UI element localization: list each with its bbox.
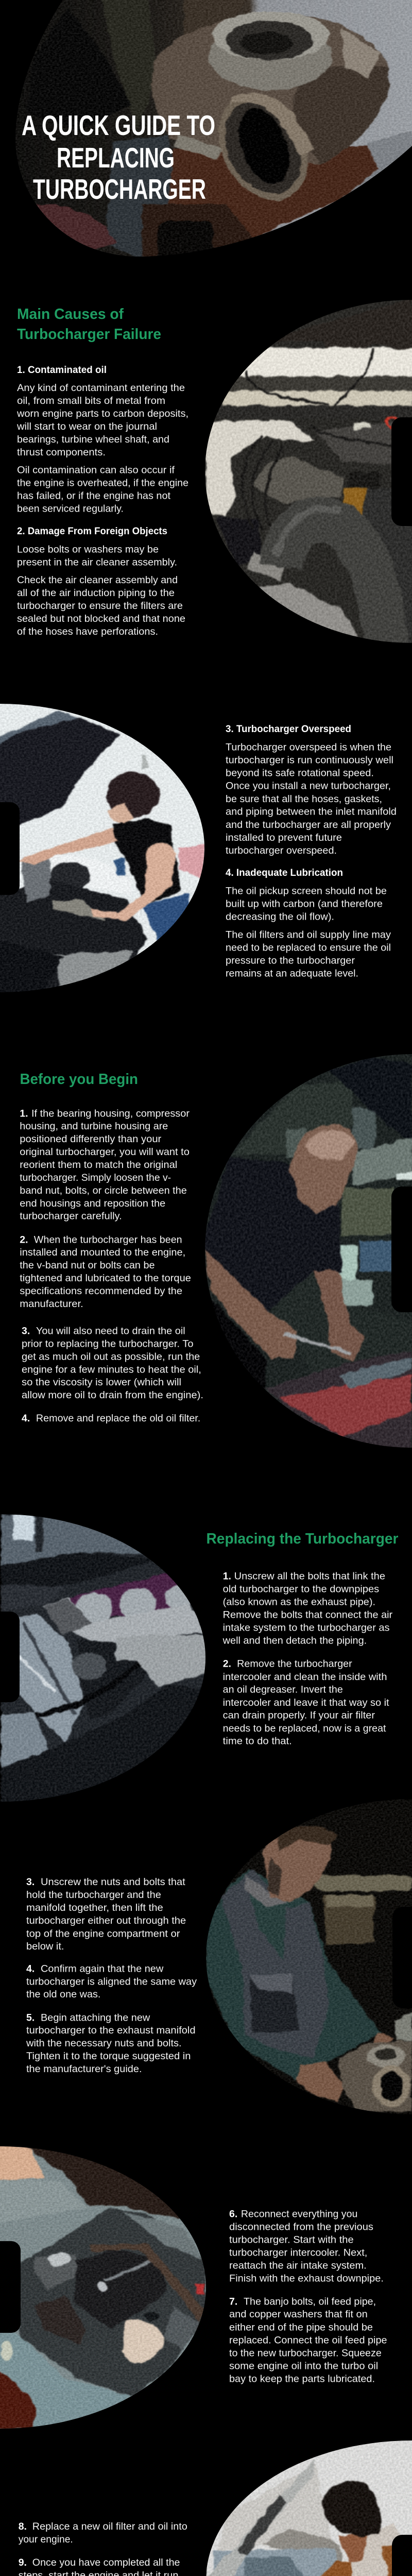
text block: replacing steps 1 and 2: Unscrew all the bolts that link the [234,1571,385,1582]
text block: replacing steps 3 to 5: manifold together, then lift the [26,1902,163,1913]
text block: causes 1 and 2: the engine is overheated, if the engine [17,477,188,488]
text block: before you begin steps: engine for a few minutes to heat the oil, [22,1364,201,1375]
text block: replacing steps 3 to 5: Confirm again that the new [41,1963,164,1974]
text block: before you begin steps: manufacturer. [20,1298,83,1310]
text block: replacing steps 6 and 7: Finish with the exhaust downpipe. [229,2273,384,2284]
text block: replacing steps 3 to 5: turbocharger is aligned the same way [26,1976,197,1987]
text block: causes 3 and 4: The oil pickup screen should not be [226,885,387,896]
text block: before you begin steps: 2. [20,1234,28,1245]
text block: causes 1 and 2 [16,364,188,637]
text block: causes 1 and 2: turbocharger to ensure the filters are [17,600,183,612]
text block: causes 1 and 2: thrust components. [17,447,106,458]
text block: before you begin steps: 1. [20,1108,28,1119]
notch: blue engine photo [0,1612,20,1702]
text block: replacing steps 1 and 2: well and then detach the piping. [222,1635,367,1647]
text block: before you begin steps: end housings and reposition the [20,1198,165,1209]
notch: BMW photo [0,2241,21,2333]
notch: woman photo [0,802,20,895]
text block: replacing steps 8 to 10: 9. [19,2557,27,2568]
text block: causes 3 and 4: pressure to the turbocharger [226,955,355,967]
heading: main causes [17,306,161,343]
text block: causes 1 and 2: oil, from small bits of metal from [17,395,165,406]
text block: before you begin steps: turbocharger carefully. [20,1211,122,1222]
text block: before you begin steps [20,1108,203,1424]
text block: causes 3 and 4: decreasing the oil flow). [226,911,334,923]
photo: BMW engine bay [0,2143,215,2435]
text block: replacing steps 1 and 2: can drain properly. If your air filter [223,1710,375,1721]
text block: replacing steps 6 and 7: The banjo bolts, oil feed pipe, [244,2296,376,2307]
text block: replacing steps 8 to 10: Once you have completed all the [32,2557,180,2568]
text block: causes 1 and 2: all of the air induction piping to the [17,587,175,599]
photo: blue engine bay [1,1510,211,1808]
text block: causes 3 and 4: Once you install a new turbocharger, [226,780,391,791]
text block: causes 3 and 4: built up with carbon (and therefore [226,898,383,909]
text block: causes 3 and 4: need to be replaced to ensure the oil [226,942,391,953]
text block: before you begin steps: the v-band nut or bolts can be [20,1260,155,1271]
text block: replacing steps 6 and 7: disconnected from the previous [229,2221,373,2232]
notch: vest mechanic photo [392,1907,412,2008]
text block: replacing steps 3 to 5: 5. [26,2012,35,2023]
text block: replacing steps 6 and 7: reattach the air intake system. [229,2260,367,2272]
text block: replacing steps 6 and 7: bay to keep the parts lubricated. [229,2374,375,2385]
notch: engine bay photo [391,417,412,526]
heading: main causes: Main Causes of [17,306,124,323]
text block: causes 3 and 4: remains at an adequate level. [226,968,358,979]
heading: main causes: Turbocharger Failure [17,326,161,343]
text block: replacing steps 8 to 10 [19,2521,187,2576]
text block: before you begin steps: allow more oil to drain from the engine). [22,1389,203,1401]
text block: causes 1 and 2: Oil contamination can also occur if [17,465,175,476]
text block: replacing steps 1 and 2: intercooler and clean the inside with [223,1671,387,1683]
title: REPLACING [57,142,175,174]
text block: replacing steps 1 and 2: old turbocharger to the downpipes [223,1583,379,1595]
text block: replacing steps 3 to 5: 4. [26,1963,35,1974]
text block: before you begin steps: band nut, bolts, or circle between the [20,1185,187,1196]
text block: before you begin steps: You will also need to drain the oil [36,1325,185,1336]
text block: replacing steps 1 and 2: time to do that. [223,1736,292,1747]
text block: replacing steps 6 and 7: either end of the pipe should be [229,2321,373,2333]
text block: causes 3 and 4: beyond its safe rotational speed. [226,768,374,779]
text block: causes 1 and 2: worn engine parts to carbon deposits, [16,408,188,419]
text block: before you begin steps: tightened and lubricated to the torque [20,1273,191,1284]
text block: replacing steps 1 and 2: an oil degreaser. Invert the [223,1684,343,1696]
text block: before you begin steps: turbocharger. Simply loosen the v- [20,1172,171,1183]
text block: before you begin steps: installed and mounted to the engine, [20,1247,185,1258]
photo: woman checking engine [205,2437,412,2576]
text block: replacing steps 6 and 7: 7. [229,2296,237,2307]
text block: replacing steps 6 and 7: turbocharger. Start with the [229,2234,354,2245]
text block: before you begin steps: When the turbocharger has been [34,1234,182,1245]
text block: replacing steps 3 to 5: Tighten it to the torque suggested in [26,2050,191,2062]
text block: replacing steps 3 to 5 [26,1876,197,2075]
text block: replacing steps 1 and 2: Remove the turbocharger [237,1658,352,1669]
text block: causes 3 and 4: turbocharger overspeed. [226,845,337,856]
notch: mechanic photo [391,1187,412,1312]
text block: causes 1 and 2: will start to wear on the journal [16,421,157,432]
text block: replacing steps 6 and 7: 6. [229,2208,237,2219]
text block: causes 1 and 2: sealed but not blocked and that none [17,613,185,624]
text block: replacing steps 8 to 10: your engine. [19,2534,73,2545]
text block: causes 1 and 2: 2. Damage From Foreign Objects [17,526,167,537]
text block: causes 1 and 2: Any kind of contaminant entering the [17,382,185,394]
text block: before you begin steps: Remove and replace the old oil filter. [36,1413,200,1424]
text block: before you begin steps: specifications recommended by the [20,1285,182,1297]
text block: causes 3 and 4: installed to prevent future [226,832,342,843]
text block: before you begin steps: housing, and turbine housing are [20,1121,168,1132]
text block: causes 3 and 4: be sure that all the hoses, gaskets, [226,793,382,805]
text block: replacing steps 3 to 5: top of the engine compartment or [26,1928,180,1939]
text block: before you begin steps: If the bearing housing, compressor [31,1108,190,1119]
text block: replacing steps 1 and 2 [222,1571,393,1747]
text block: before you begin steps: reorient them to match the original [20,1159,177,1171]
text block: replacing steps 1 and 2: intercooler and leave it that way so it [223,1697,389,1708]
text block: replacing steps 3 to 5: Unscrew the nuts and bolts that [41,1876,185,1888]
text block: replacing steps 3 to 5: with the necessary nuts and bolts. [26,2038,182,2049]
text block: replacing steps 1 and 2: 1. [223,1571,231,1582]
text block: replacing steps 1 and 2: intake system to the turbocharger as [223,1622,390,1634]
text block: replacing steps 6 and 7: some engine oil into the turbo oil [229,2361,378,2372]
text block: causes 3 and 4: 4. Inadequate Lubrication [226,867,343,878]
heading: before you begin: Before you Begin [20,1071,138,1088]
text block: replacing steps 1 and 2: needs to be replaced, now is a great [223,1723,386,1734]
text block: replacing steps 6 and 7: replaced. Connect the oil feed pipe [229,2334,387,2346]
text block: causes 1 and 2: Loose bolts or washers may be [17,544,159,555]
text block: causes 3 and 4: The oil filters and oil supply line may [226,929,391,940]
text block: replacing steps 6 and 7: to the new turbocharger. Squeeze [229,2348,382,2359]
photo: engine bay with hoses [200,289,412,656]
photo: mechanic with ratchet [200,1048,412,1453]
text block: replacing steps 6 and 7: Reconnect everything you [241,2208,357,2219]
text block: before you begin steps: original turbocharger, you will want to [20,1146,190,1158]
text block: causes 1 and 2: Check the air cleaner assembly and [17,574,178,586]
notch: woman engine photo [392,2535,412,2576]
text block: replacing steps 8 to 10: Replace a new oil filter and oil into [32,2521,187,2532]
title: A QUICK GUIDE TO [22,109,215,141]
text block: replacing steps 6 and 7 [229,2208,387,2385]
text block: replacing steps 1 and 2: (also known as the exhaust pipe). [223,1597,375,1608]
text block: replacing steps 3 to 5: the manufacturer's guide. [26,2063,142,2075]
text block: before you begin steps: get as much oil out as possible, run the [22,1351,200,1362]
text block: replacing steps 1 and 2: 2. [223,1658,231,1669]
text block: replacing steps 6 and 7: and copper washers that fit on [229,2309,368,2320]
text block: replacing steps 8 to 10: 8. [19,2521,27,2532]
text block: before you begin steps: 4. [22,1413,30,1424]
text block: causes 3 and 4: and piping between the inlet manifold [226,806,397,818]
text block: replacing steps 6 and 7: turbocharger intercooler. Next, [229,2247,367,2258]
photo: woman pouring oil [0,704,204,992]
text block: before you begin steps: prior to replacing the turbocharger. To [22,1338,194,1349]
text block: replacing steps 1 and 2: Remove the bolts that connect the air [223,1609,393,1621]
text block: before you begin steps: positioned differently than your [20,1133,162,1145]
text block: causes 3 and 4: turbocharger is run continuously well [226,754,393,766]
text block: causes 1 and 2: bearings, turbine wheel shaft, and [17,434,169,445]
text block: before you begin steps: 3. [22,1325,30,1336]
text block: replacing steps 3 to 5: 3. [26,1876,35,1888]
text block: causes 1 and 2: been serviced regularly. [17,503,124,514]
text block: replacing steps 3 to 5: turbocharger either out through the [26,1915,186,1926]
text block: causes 3 and 4: 3. Turbocharger Overspeed [226,723,351,735]
text block: causes 3 and 4 [226,723,397,979]
photo: turbocharger hero [0,0,412,274]
text block: causes 3 and 4: Turbocharger overspeed is when the [226,742,391,753]
text block: replacing steps 3 to 5: turbocharger to the exhaust manifold [26,2025,196,2036]
heading: replacing the turbocharger: Replacing the Turbocharger [206,1531,399,1547]
title [22,109,215,205]
text block: before you begin steps: so the viscosity is lower (which will [22,1377,181,1388]
text block: replacing steps 3 to 5: below it. [26,1941,64,1952]
text block: causes 3 and 4: and the turbocharger are all properly [226,819,391,831]
title: TURBOCHARGER [33,173,206,205]
text block: causes 1 and 2: 1. Contaminated oil [17,364,107,376]
text block: replacing steps 3 to 5: hold the turbocharger and the [26,1889,161,1901]
text block: causes 1 and 2: of the hoses have perforations. [17,626,158,637]
text block: causes 1 and 2: present in the air cleaner assembly. [17,556,177,568]
text block: replacing steps 3 to 5: the old one was. [26,1989,100,2000]
photo: mechanic in vest with turbo [205,1798,412,2117]
text block: causes 1 and 2: has failed, or if the engine has not [17,490,171,502]
text block: replacing steps 3 to 5: Begin attaching the new [41,2012,150,2023]
